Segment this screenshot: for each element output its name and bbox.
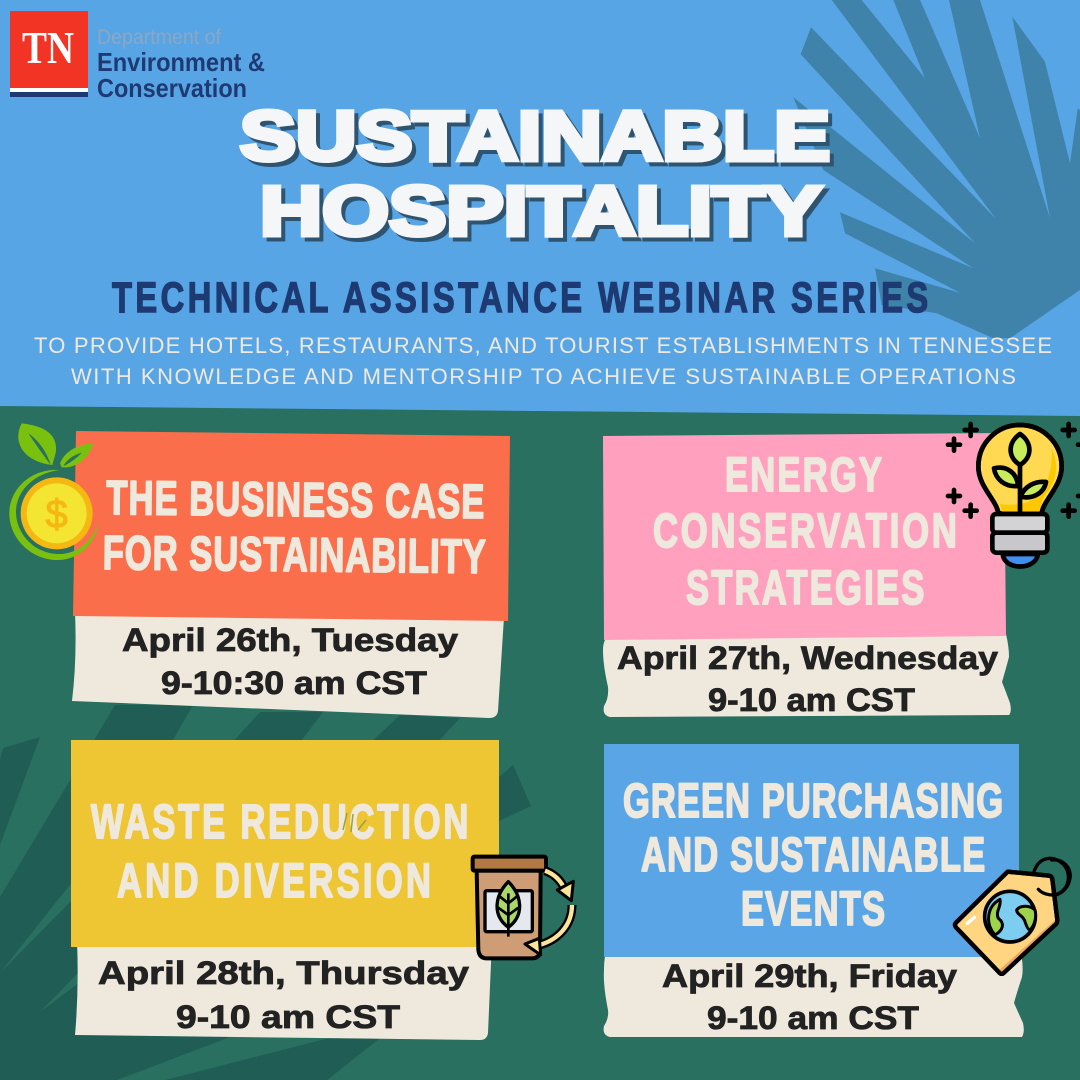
heading card <box>603 433 1006 640</box>
heading card <box>73 431 510 621</box>
panel: waste session <box>71 740 499 1040</box>
description text: TO PROVIDE HOTELS, RESTAURANTS, AND TOURIST ESTABLISHMENTS IN TENNESSEE <box>34 333 1052 358</box>
session date: April 26th, Tuesday <box>122 622 458 658</box>
logo mark: TN <box>22 22 74 73</box>
title <box>240 97 830 250</box>
session date: 9-10:30 am CST <box>161 665 428 701</box>
description text <box>34 333 1052 389</box>
session title <box>102 470 487 583</box>
session title: AND SUSTAINABLE <box>641 827 985 881</box>
panel: business case session <box>72 431 510 718</box>
session date: April 29th, Friday <box>662 958 957 994</box>
icon: earth price tag <box>955 858 1070 974</box>
logo wordmark: Environment & <box>97 47 265 77</box>
green lower panel <box>0 406 1080 1080</box>
logo mark <box>10 11 88 97</box>
session date: 9-10 am CST <box>707 1000 920 1036</box>
session date: April 28th, Thursday <box>98 955 469 991</box>
panel: green purchasing session <box>604 744 1024 1037</box>
session date: April 27th, Wednesday <box>617 640 998 676</box>
title: HOSPITALITY <box>260 172 822 250</box>
heading card <box>71 740 499 947</box>
session title: ENERGY <box>725 447 882 501</box>
session date <box>662 958 957 1036</box>
session date <box>98 955 469 1035</box>
session title: FOR SUSTAINABILITY <box>102 525 486 583</box>
icon: compostable cup with arrows <box>473 857 573 958</box>
session title: CONSERVATION <box>653 503 957 557</box>
session title <box>653 447 957 614</box>
date strip <box>603 630 1011 717</box>
session title <box>91 794 468 907</box>
panel: energy session <box>603 433 1011 718</box>
icon: coin with leaves: $ <box>46 492 68 536</box>
session date: 9-10 am CST <box>708 682 915 718</box>
session title: GREEN PURCHASING <box>623 773 1003 827</box>
title: SUSTAINABLE <box>240 97 830 175</box>
icon: coin with leaves <box>9 423 98 560</box>
logo wordmark: Department of <box>97 26 221 49</box>
session title: THE BUSINESS CASE <box>106 470 485 528</box>
subtitle: TECHNICAL ASSISTANCE WEBINAR SERIES <box>112 274 928 322</box>
logo: TN Department of Environment & Conservation <box>10 11 265 103</box>
date strip <box>604 950 1024 1037</box>
session title: AND DIVERSION <box>117 853 431 907</box>
heading card <box>604 744 1019 957</box>
session date: 9-10 am CST <box>176 999 401 1035</box>
session title: EVENTS <box>741 881 885 935</box>
icon: light bulb with plant <box>948 424 1080 566</box>
logo wordmark <box>97 26 265 103</box>
session date <box>617 640 998 718</box>
date strip <box>72 612 504 718</box>
session title: STRATEGIES <box>686 560 924 614</box>
session title <box>623 773 1003 935</box>
session title: WASTE REDUCTION <box>91 794 468 848</box>
date strip <box>75 940 492 1040</box>
description text: WITH KNOWLEDGE AND MENTORSHIP TO ACHIEVE SUSTAINABLE OPERATIONS <box>71 364 1016 389</box>
session date <box>122 622 458 701</box>
logo wordmark: Conservation <box>97 73 247 103</box>
palm leaf background: header <box>793 0 1080 338</box>
palm leaf background: lower panel <box>0 705 531 1080</box>
